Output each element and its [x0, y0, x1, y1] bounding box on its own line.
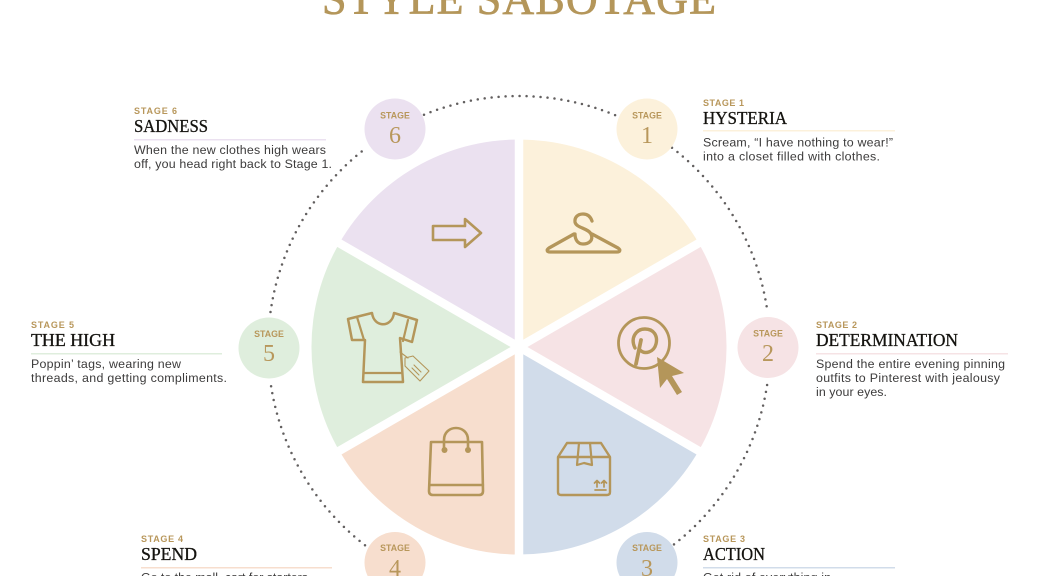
- text block: stage 6: STAGE 6: [134, 106, 177, 116]
- text block: stage 6: [134, 106, 332, 171]
- badge: stage 4: STAGE: [380, 543, 410, 553]
- text block: stage 5: threads, and getting compliments.: [31, 371, 227, 385]
- badge: stage 3: [616, 532, 678, 576]
- badge: stage 6: [364, 98, 426, 160]
- badge: stage 6: STAGE: [380, 110, 410, 120]
- pie wheel: [311, 130, 727, 564]
- text block: stage 5: THE HIGH: [31, 330, 115, 350]
- wedge: stage 4: [339, 347, 519, 554]
- badge: stage 1: STAGE: [632, 110, 662, 120]
- text block: stage 2: Spend the entire evening pinning: [816, 357, 1005, 371]
- text block: stage 5: Poppin’ tags, wearing new: [31, 357, 181, 371]
- dotted cycle ring: [270, 96, 768, 545]
- wedge: stage 2: [519, 243, 727, 451]
- text block: stage 2: in your eyes.: [816, 385, 887, 399]
- icon: t-shirt with tag: [348, 313, 429, 382]
- text block: stage 2: DETERMINATION: [816, 330, 958, 350]
- wedge: stage 3: [519, 347, 699, 554]
- text block: stage 4: STAGE 4: [141, 534, 183, 544]
- badge: stage 1: [616, 98, 678, 160]
- badge: stage 2: STAGE: [753, 328, 783, 338]
- text block: stage 1: Scream, “I have nothing to wear!”: [703, 136, 893, 150]
- badge: stage 6: 6: [389, 123, 401, 149]
- badge: stage 5: 5: [263, 341, 275, 367]
- wedge: stage 6: [339, 139, 519, 347]
- badge: stage 2: [738, 317, 798, 378]
- text block: stage 4: [141, 534, 332, 576]
- wedge: stage 5: [311, 243, 519, 451]
- text block: stage 3: STAGE 3: [703, 534, 745, 544]
- text block: stage 5: [31, 320, 227, 385]
- text block: stage 6: off, you head right back to Stage 1.: [134, 157, 332, 171]
- badge: stage 5: STAGE: [254, 329, 284, 339]
- badge: stage 3: STAGE: [632, 543, 662, 553]
- text block: stage 4: SPEND: [141, 544, 197, 564]
- text block: stage 1: HYSTERIA: [703, 108, 787, 128]
- wedge: stage 1: [519, 139, 699, 347]
- badge: stage 5: [238, 318, 300, 378]
- badge: stage 2: 2: [762, 341, 774, 367]
- badge: stage 1: 1: [641, 123, 653, 149]
- icon: box: [558, 443, 610, 495]
- icon: pinterest cursor: [618, 318, 684, 395]
- text block: stage 2: STAGE 2: [816, 320, 857, 330]
- text block: stage 6: When the new clothes high wears: [134, 143, 326, 157]
- icon: arrow: [433, 219, 481, 247]
- text block: stage 1: STAGE 1: [703, 98, 744, 108]
- text block: stage 2: [816, 320, 1008, 399]
- text block: stage 1: [703, 98, 895, 164]
- text block: stage 3: [703, 534, 895, 576]
- badge: stage 4: [364, 532, 426, 576]
- icon: hanger: [547, 214, 620, 252]
- text block: stage 6: SADNESS: [134, 116, 208, 136]
- text block: stage 5: STAGE 5: [31, 320, 74, 330]
- text block: stage 2: outfits to Pinterest with jealousy: [816, 371, 1001, 385]
- text block: stage 1: into a closet filled with clothes.: [703, 150, 880, 164]
- text block: stage 3: ACTION: [703, 544, 765, 564]
- icon: shopping bag: [429, 428, 483, 495]
